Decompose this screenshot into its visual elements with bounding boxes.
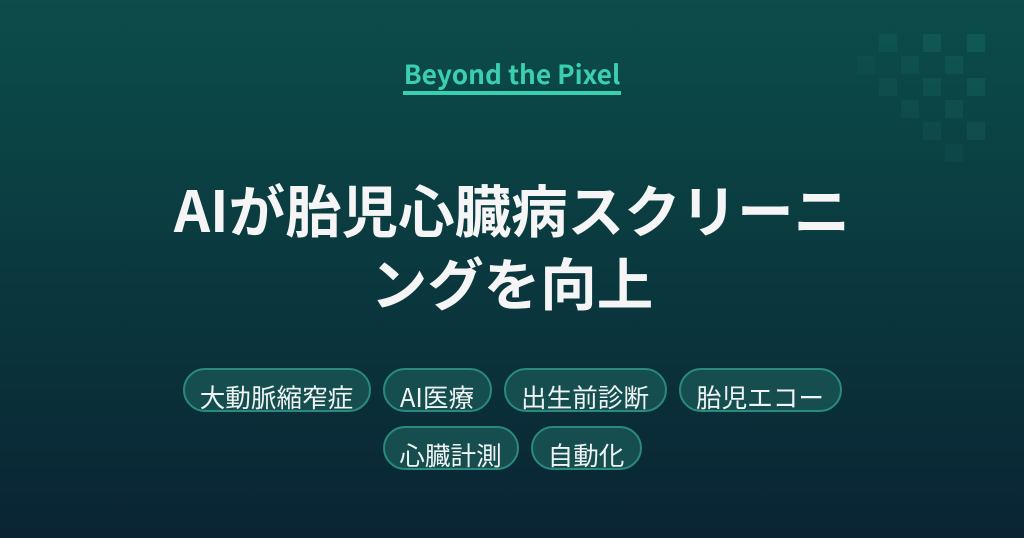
decorative square pattern — [879, 34, 985, 140]
tag: 胎児エコー — [679, 368, 842, 412]
tag: 自動化: 自動化 — [548, 436, 624, 472]
title: AIが胎児心臓病スクリーニ — [174, 167, 850, 249]
tag: 出生前診断 — [504, 368, 667, 412]
tag: 心臓計測 — [383, 426, 519, 470]
tag: 自動化 — [531, 426, 642, 470]
tag: 出生前診断: 出生前診断 — [521, 378, 649, 414]
brand underline — [403, 91, 621, 95]
tag: AI医療: AI医療 — [400, 378, 474, 414]
brand label: Beyond the Pixel: Beyond the Pixel — [404, 53, 620, 92]
tag: AI医療 — [383, 368, 492, 412]
tag: 心臓計測: 心臓計測 — [399, 436, 502, 472]
tag: 大動脈縮窄症: 大動脈縮窄症 — [200, 378, 353, 414]
tag: 大動脈縮窄症 — [183, 368, 371, 412]
title: ングを向上 — [371, 240, 653, 322]
title — [174, 167, 850, 322]
tag: 胎児エコー: 胎児エコー — [696, 378, 824, 414]
